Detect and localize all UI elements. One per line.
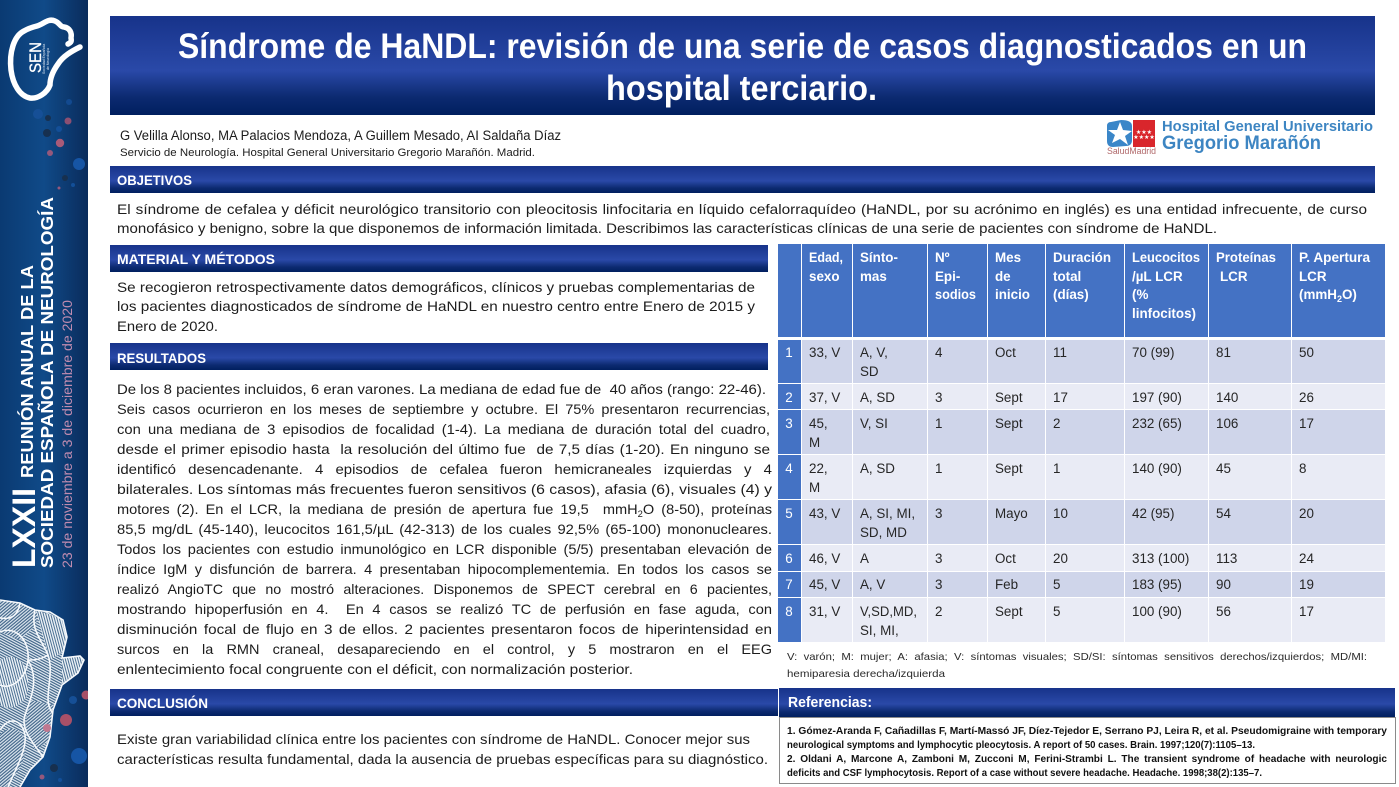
- title line 1: Síndrome de HaNDL: revisión de una serie de casos diagnosticados en un: [178, 27, 1307, 66]
- table row 6: 46, V: [809, 551, 840, 566]
- table row 5: 54: [1216, 506, 1231, 521]
- table header row: sodios: [935, 287, 976, 302]
- table row 7: 183 (95): [1132, 577, 1182, 592]
- table header row: Sínto-: [860, 250, 898, 265]
- title line 2: hospital terciario.: [606, 69, 877, 108]
- table row 4: 8: [1299, 461, 1306, 476]
- table row 3: 106: [1216, 416, 1238, 431]
- heading: referencias: Referencias:: [788, 694, 872, 711]
- table header row: mas: [860, 269, 887, 284]
- table row 6: 113: [1216, 551, 1237, 566]
- table row 8: Sept: [995, 604, 1023, 619]
- resultados text: realizó AngioTC que no mostró alteraciones. Disponemos de SPECT cerebral en 6 pacientes,: [117, 581, 772, 597]
- table row 6: 6: [785, 551, 793, 566]
- panel: conclusión: [110, 689, 778, 767]
- table row 7: 3: [935, 577, 942, 592]
- table row 1: SD: [860, 364, 879, 379]
- table row 5: 20: [1299, 506, 1314, 521]
- resultados text: desde el primer episodio hasta la resolución del último fue de 7,5 días (1-20). En ninguno se: [117, 441, 770, 457]
- heading: material y métodos: [110, 245, 768, 272]
- table header row: LCR: [1299, 269, 1327, 284]
- resultados text: disminución focal de flujo en 3 de ellos. 2 pacientes presentaron focos de hiperintensidad en: [117, 621, 772, 637]
- heading: resultados: [110, 343, 768, 370]
- table row 6: 313 (100): [1132, 551, 1189, 566]
- table row 2: [785, 390, 1314, 405]
- objetivos text: El síndrome de cefalea y déficit neurológico transitorio con pleocitosis linfocitaria en líquido cefalorraquídeo (HaNDL, por su acrónimo en inglés) es una entidad infrecuente, de curso: [117, 201, 1367, 217]
- table row 6: A: [860, 551, 869, 566]
- table header row: Proteínas: [1216, 250, 1276, 265]
- table header row: total: [1053, 269, 1081, 284]
- table row 7: A, V: [860, 577, 885, 592]
- table row 1: 81: [1216, 345, 1231, 360]
- references text: neurological symptoms and lymphocytic pleocytosis. A report of 50 cases. Brain. 1997;120(7):1105–13.: [787, 740, 1255, 751]
- table header row: de: [995, 269, 1011, 284]
- table row 8: 2: [935, 604, 942, 619]
- table header row: 2: [1337, 294, 1342, 304]
- table header row: /µL LCR: [1132, 269, 1183, 284]
- table: patient case series: [778, 244, 1385, 642]
- authors: G Velilla Alonso, MA Palacios Mendoza, A Guillem Mesado, AI Saldaña Díaz: [120, 128, 561, 143]
- table row 5: 3: [935, 506, 942, 521]
- table header row: Edad,: [809, 250, 843, 265]
- table row 5: SD, MD: [860, 525, 907, 540]
- references text: 2. Oldani A, Marcone A, Zamboni M, Zucconi M, Ferini-Strambi L. The transient syndrome of headache with neurologic: [787, 754, 1387, 765]
- illustration: wireframe brain: [0, 598, 90, 787]
- resultados text: 2: [638, 509, 643, 519]
- references box: [780, 718, 1396, 784]
- table row 8: 17: [1299, 604, 1314, 619]
- table header row: inicio: [995, 287, 1030, 302]
- icon: Salud Madrid blue star: [1107, 120, 1132, 147]
- table header row: Leucocitos: [1132, 250, 1200, 265]
- table row 5: 5: [785, 506, 793, 521]
- resultados text: De los 8 pacientes incluidos, 6 eran varones. La mediana de edad fue de 40 años (rango: 22-46).: [117, 381, 766, 397]
- table row 3: 3: [785, 416, 793, 431]
- resultados text: enlentecimiento focal congruente con el déficit, con normalización posterior.: [117, 661, 633, 677]
- table row 8: 31, V: [809, 604, 840, 619]
- heading: objetivos: [110, 166, 1375, 193]
- table row 5: A, SI, MI,: [860, 506, 915, 521]
- table row 1: 11: [1053, 345, 1067, 360]
- table row 6: 20: [1053, 551, 1068, 566]
- table row banding: [778, 244, 1385, 642]
- hospital logo: [1107, 119, 1373, 156]
- objetivos text: [117, 201, 1367, 236]
- panel: referencias: [779, 688, 1396, 784]
- table header row: (mmH: [1299, 287, 1337, 302]
- table row 6: [785, 551, 1314, 566]
- panel: resultados: [110, 343, 772, 677]
- table row 3: 2: [1053, 416, 1060, 431]
- table row 8: V,SD,MD,: [860, 604, 917, 619]
- table row 4: 4: [785, 461, 793, 476]
- table row 3: M: [809, 435, 820, 450]
- table row 3: 232 (65): [1132, 416, 1182, 431]
- table row 2: 197 (90): [1132, 390, 1182, 405]
- table row 4: M: [809, 480, 820, 495]
- table row 6: 24: [1299, 551, 1314, 566]
- heading: conclusión: [110, 689, 778, 716]
- table row 4: 1: [1053, 461, 1060, 476]
- table row 4: A, SD: [860, 461, 895, 476]
- table row 7: 90: [1216, 577, 1231, 592]
- table row 1: 1: [785, 345, 793, 360]
- heading: material y métodos: MATERIAL Y MÉTODOS: [117, 251, 275, 267]
- table row 4: [785, 461, 1306, 495]
- objetivos text: monofásico y benigno, sobre la que disponemos de información limitada. Describimos las características clínicas de una serie de pacientes con síndrome de HaNDL.: [117, 220, 1217, 236]
- table header row: linfocitos): [1132, 306, 1196, 321]
- table row 7: 7: [785, 577, 793, 592]
- icon: Madrid red flag: ★★★: [1136, 129, 1152, 136]
- table row 8: 5: [1053, 604, 1060, 619]
- resultados text: bilaterales. Los síntomas más frecuentes fueron sensitivos (6 casos), afasia (6), visuales (4) y: [117, 481, 772, 497]
- panel: objetivos: [110, 166, 1375, 236]
- table row 8: 56: [1216, 604, 1231, 619]
- resultados text: Seis casos ocurrieron en los meses de septiembre y octubre. El 75% presentaron recurrencias,: [117, 401, 770, 417]
- icon: Madrid red flag: [1133, 120, 1155, 147]
- icon: SEN society logo: Sociedad Española: [42, 44, 46, 74]
- resultados text: 85,5 mg/dL (45-140), leucocitos 161,5/µL (42-313) de los cuales 92,5% (65-100) mononucleares.: [117, 521, 772, 537]
- resultados text: surcos en la RMN craneal, desapareciendo en el control, y 5 mostraron en el EEG: [117, 641, 772, 657]
- table row 3: 17: [1299, 416, 1314, 431]
- table row 8: [785, 604, 1314, 638]
- table row 3: 45,: [809, 416, 828, 431]
- table row 2: A, SD: [860, 390, 895, 405]
- references text: deficits and CSF lymphocytosis. Report of a case without severe headache. Headache. 1998;38(2):135–7.: [787, 768, 1262, 779]
- table row 3: Sept: [995, 416, 1023, 431]
- resultados text: con una mediana de 3 episodios de focalidad (1-4). La mediana de duración total del cuadro,: [117, 421, 770, 437]
- table row 1: A, V,: [860, 345, 888, 360]
- table legend: [787, 651, 1367, 680]
- table row 2: 2: [785, 390, 793, 405]
- table row 8: 8: [785, 604, 793, 619]
- resultados text: mostrando hipoperfusión en 4. En 4 casos se realizó TC de perfusión en fase aguda, con: [117, 601, 772, 617]
- table row 6: 3: [935, 551, 942, 566]
- table header row: (%: [1132, 287, 1148, 302]
- resultados text: [117, 381, 772, 677]
- table row 5: 42 (95): [1132, 506, 1174, 521]
- heading: resultados: RESULTADOS: [117, 350, 206, 366]
- table row 7: [785, 577, 1314, 592]
- table row 3: 1: [935, 416, 942, 431]
- material y métodos text: [117, 279, 755, 334]
- table row 1: 50: [1299, 345, 1314, 360]
- authors and affiliation: [120, 128, 561, 159]
- table header row: Mes: [995, 250, 1021, 265]
- table row 4: Sept: [995, 461, 1023, 476]
- table row 5: 10: [1053, 506, 1068, 521]
- table row 1: 33, V: [809, 345, 840, 360]
- table row 7: Feb: [995, 577, 1018, 592]
- table row 4: 1: [935, 461, 942, 476]
- table row 2: 3: [935, 390, 942, 405]
- table row 4: 140 (90): [1132, 461, 1182, 476]
- icon: SEN society logo: SEN: [26, 42, 45, 73]
- table header row: P. Apertura: [1299, 250, 1371, 265]
- material y métodos text: los pacientes diagnosticados de síndrome de HaNDL en nuestro centro entre Enero de 2015 y: [117, 298, 755, 314]
- conference edition: LXXII: [6, 488, 42, 568]
- conference name line 1: REUNIÓN ANUAL DE LA: [16, 265, 37, 478]
- table row 1: [785, 345, 1314, 379]
- table row 8: 100 (90): [1132, 604, 1182, 619]
- resultados text: O (8-50), proteínas: [643, 501, 772, 517]
- hospital name line 1: Hospital General Universitario: [1162, 119, 1373, 135]
- heading: objetivos: OBJETIVOS: [117, 172, 192, 188]
- table legend: V: varón; M: mujer; A: afasia; V: síntomas visuales; SD/SI: síntomas sensitivos derechos/izquierdos; MD/MI:: [787, 651, 1367, 663]
- table header row: (días): [1053, 287, 1089, 302]
- table row 4: 45: [1216, 461, 1231, 476]
- table row 7: 45, V: [809, 577, 840, 592]
- table row 3: [785, 416, 1314, 450]
- hospital name line 2: Gregorio Marañón: [1162, 133, 1321, 154]
- icon: Madrid red flag: ★★★★: [1133, 134, 1155, 141]
- table row 1: 4: [935, 345, 943, 360]
- resultados text: Todos los pacientes con estudio inmunológico en LCR disponible (5/5) presentaban elevación de: [117, 541, 772, 557]
- conclusión text: [117, 731, 768, 767]
- conference name line 2: SOCIEDAD ESPAÑOLA DE NEUROLOGÍA: [36, 197, 57, 568]
- table row 3: V, SI: [860, 416, 888, 431]
- table header row: LCR: [1220, 269, 1248, 284]
- table row 2: Sept: [995, 390, 1023, 405]
- table header row: Epi-: [935, 269, 960, 284]
- heading: referencias: [779, 688, 1395, 717]
- resultados text: identificó desencadenante. 4 episodios de cefalea fueron hemicraneales izquierdas y 4: [117, 461, 772, 477]
- references text: [787, 726, 1387, 779]
- icon: SEN society logo: de Neurología: [46, 48, 50, 70]
- heading: conclusión: CONCLUSIÓN: [117, 694, 208, 711]
- table header row: [778, 244, 1385, 337]
- table legend: hemiparesia derecha/izquierda: [787, 668, 945, 680]
- table row 5: 43, V: [809, 506, 840, 521]
- table row 1: 70 (99): [1132, 345, 1174, 360]
- table header row: Duración: [1053, 250, 1111, 265]
- table row 2: 37, V: [809, 390, 840, 405]
- resultados text: motores (2). En el LCR, la mediana de presión de apertura fue 19,5 mmH: [117, 501, 618, 517]
- table row 2: 17: [1053, 390, 1068, 405]
- affiliation: Servicio de Neurología. Hospital General Universitario Gregorio Marañón. Madrid.: [120, 147, 535, 159]
- table row 6: Oct: [995, 551, 1016, 566]
- table row 4: 22,: [809, 461, 828, 476]
- material y métodos text: Enero de 2020.: [117, 318, 218, 334]
- table row 5: [785, 506, 1314, 540]
- conclusión text: Existe gran variabilidad clínica entre los pacientes con síndrome de HaNDL. Conocer mejor sus: [117, 731, 750, 747]
- material y métodos text: Se recogieron retrospectivamente datos demográficos, clínicos y pruebas complementarias de: [117, 279, 755, 295]
- icon: SEN society logo: [11, 20, 80, 98]
- panel: conference sidebar: [0, 0, 90, 787]
- resultados text: índice IgM y disfunción de barrera. 4 presentaban hipocomplementemia. En todos los casos se: [117, 561, 772, 577]
- conference dates: 23 de noviembre a 3 de diciembre de 2020: [59, 300, 75, 568]
- table row 2: 140: [1216, 390, 1238, 405]
- decorative network dots, upper: [33, 99, 85, 190]
- title banner: [110, 16, 1375, 115]
- table row 5: Mayo: [995, 506, 1028, 521]
- table row 2: 26: [1299, 390, 1314, 405]
- Salud Madrid wordmark: SaludMadrid: [1107, 146, 1156, 156]
- conclusión text: características resulta fundamental, dada la ausencia de pruebas específicas para su diagnóstico.: [117, 751, 768, 767]
- table row 7: 19: [1299, 577, 1314, 592]
- table header row: O): [1342, 287, 1357, 302]
- table row 1: Oct: [995, 345, 1016, 360]
- table row 7: 5: [1053, 577, 1060, 592]
- table header row: Nº: [935, 250, 950, 265]
- table row 8: SI, MI,: [860, 623, 899, 638]
- references text: 1. Gómez-Aranda F, Cañadillas F, Martí-Massó JF, Díez-Tejedor E, Serrano PJ, Leira R, et al. Pseudomigraine with temporary: [787, 726, 1387, 737]
- panel: material y métodos: [110, 245, 768, 334]
- table header row: sexo: [809, 269, 840, 284]
